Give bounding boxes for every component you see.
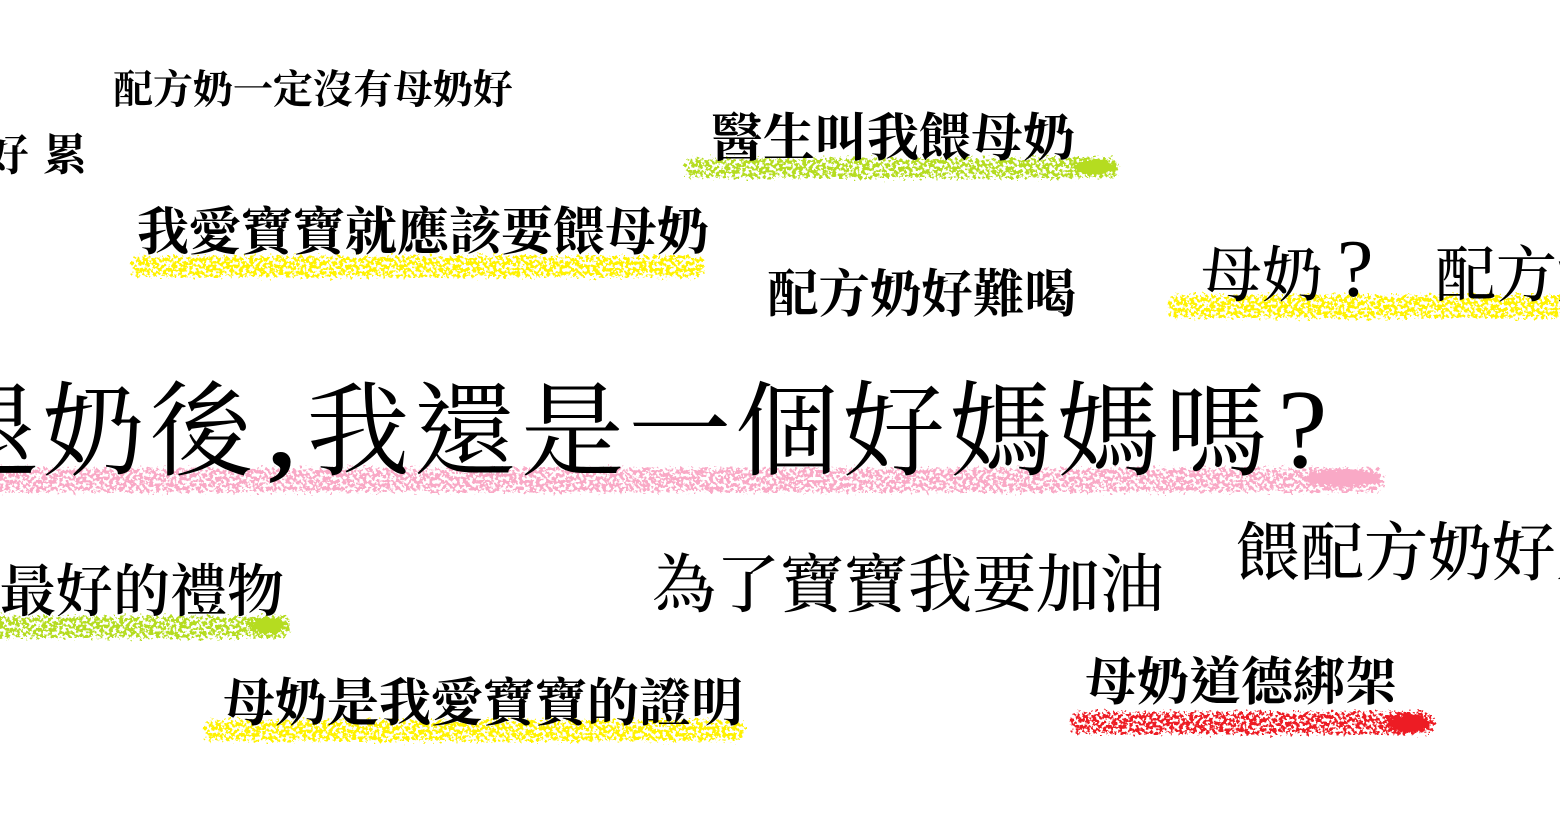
highlight: green xyxy=(682,154,1120,182)
text with red highlight: breast milk moral pressure: 母奶道德綁架 xyxy=(1085,655,1397,712)
text with yellow highlight: breast milk is proof of love: 母奶是我愛寶寶的證明 xyxy=(223,676,743,733)
text with green highlight: best gift: 最好的禮物 xyxy=(0,561,284,624)
text: formula is not necessarily worse: 配方奶一定沒有母奶好 xyxy=(113,67,513,112)
text with yellow highlight: breast milk or formula: ? xyxy=(1337,223,1373,314)
highlight: green xyxy=(0,612,292,642)
highlight: yellow xyxy=(129,252,705,281)
text with green highlight: doctor told me to breastfeed: 醫生叫我餵母奶 xyxy=(711,111,1075,168)
main heading with pink highlight: after stopping breastfeeding, am I still a good mother?: , xyxy=(269,376,294,490)
text with green highlight: doctor told me to breastfeed xyxy=(682,111,1120,182)
text with red highlight: breast milk moral pressure xyxy=(1069,654,1436,738)
text: I will do my best for baby: 為了寶寶我要加油 xyxy=(652,550,1164,621)
highlight: yellow xyxy=(202,716,747,746)
highlight: yellow xyxy=(1166,292,1560,322)
main heading with pink highlight: after stopping breastfeeding, am I still a good mother?: ? xyxy=(1278,368,1327,492)
highlight: pink xyxy=(0,464,1386,496)
text with yellow highlight: loving baby means breastfeeding: 我愛寶寶就應該要餵母奶 xyxy=(137,205,709,262)
text: formula tastes awful: 配方奶好難喝 xyxy=(767,267,1076,324)
text with yellow highlight: breast milk or formula xyxy=(1166,223,1560,322)
highlight: red xyxy=(1069,708,1436,738)
